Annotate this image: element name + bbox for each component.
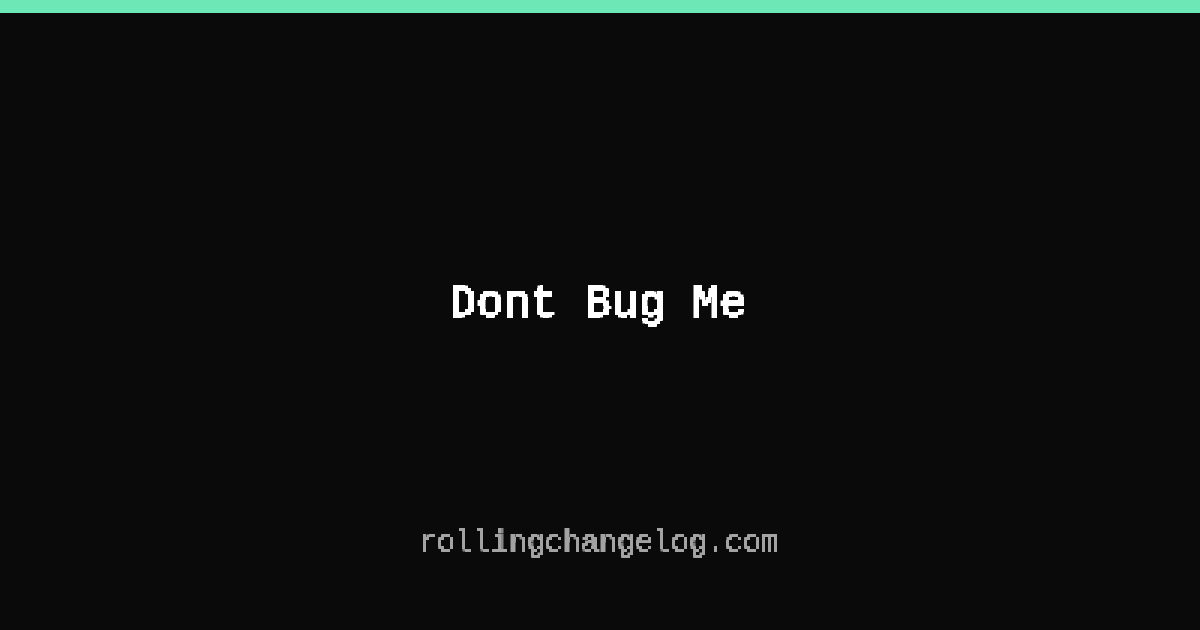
site url: rollingchangelog.com — [419, 527, 779, 561]
title: Dont Bug Me — [450, 279, 747, 330]
top accent bar — [0, 0, 1200, 13]
